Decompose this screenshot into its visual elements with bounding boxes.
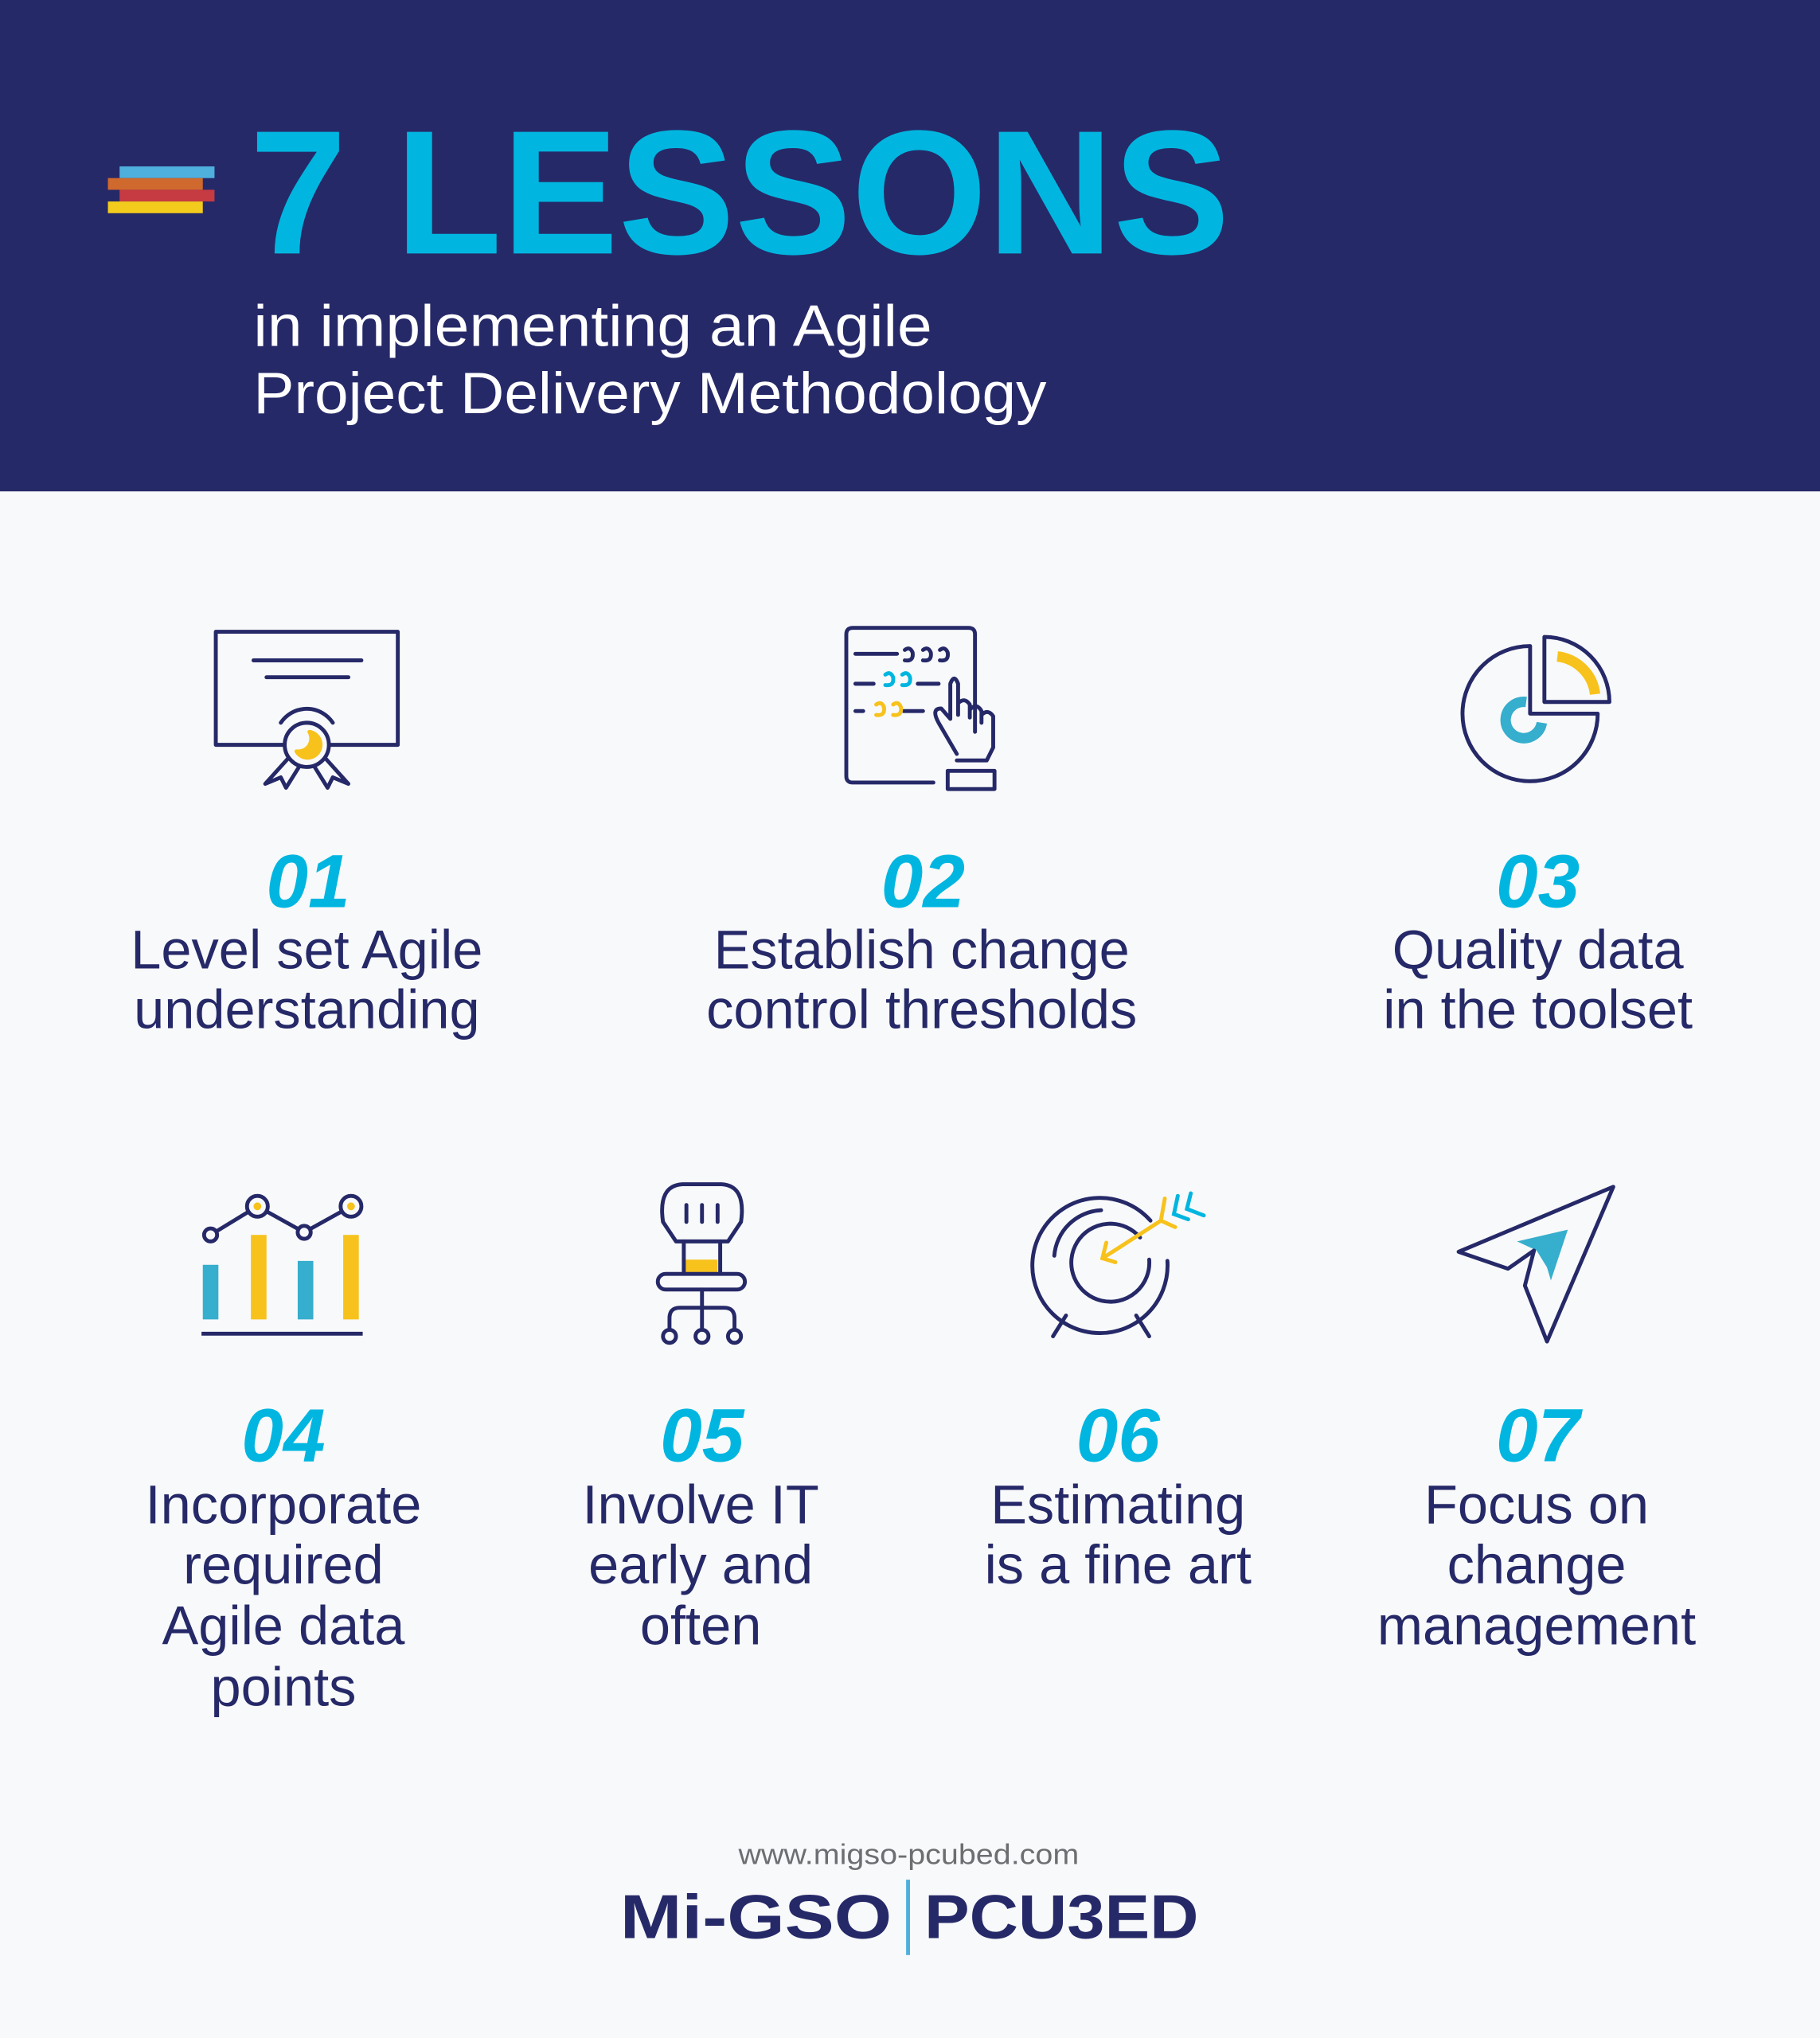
title: 7 LESSONS	[250, 94, 1230, 291]
subtitle line 2: Project Delivery Methodology	[253, 360, 1047, 426]
footer logo	[620, 1880, 1198, 1955]
footer url: www.migso-pcubed.com	[737, 1838, 1079, 1871]
lesson 04	[146, 1196, 421, 1717]
header band	[0, 0, 1820, 491]
icon: certificate	[216, 632, 398, 788]
lesson 07: change	[1447, 1534, 1627, 1595]
icon: pie chart	[1463, 637, 1609, 781]
icon: stacked color bars	[108, 166, 214, 213]
lesson 04: points	[210, 1656, 356, 1717]
number 02: 02	[881, 840, 965, 924]
lesson 05: early and	[588, 1534, 813, 1595]
number 07: 07	[1496, 1393, 1584, 1478]
lesson 07	[1377, 1187, 1696, 1657]
lesson 05: often	[640, 1595, 761, 1657]
number 05: 05	[660, 1393, 745, 1478]
text: Involve IT	[583, 1474, 819, 1536]
lesson 02	[706, 628, 1137, 1040]
number 03: 03	[1496, 840, 1580, 924]
text: Incorporate	[146, 1474, 421, 1536]
text: Establish change	[714, 919, 1130, 980]
lesson 01	[131, 632, 482, 1040]
lesson 07: management	[1377, 1595, 1696, 1657]
footer logo: Mi-GSO	[620, 1882, 892, 1952]
number 01: 01	[266, 840, 350, 924]
icon: paper plane	[1459, 1187, 1613, 1341]
text: Level set Agile	[131, 919, 482, 980]
subtitle: in implementing an Agile	[253, 292, 932, 358]
lesson 04: required	[183, 1534, 384, 1595]
text: Estimating	[990, 1474, 1245, 1536]
lesson 02: control thresholds	[706, 979, 1137, 1040]
icon: document with hand	[846, 628, 994, 789]
lesson 04: Agile data	[162, 1595, 405, 1657]
number 06: 06	[1076, 1393, 1161, 1478]
text: Focus on	[1424, 1474, 1649, 1536]
footer logo: PCU3ED	[924, 1882, 1198, 1952]
icon: office chair	[658, 1185, 745, 1343]
lesson 06	[985, 1193, 1252, 1595]
icon: bar and line chart	[201, 1196, 363, 1333]
lesson 05	[583, 1185, 819, 1657]
number 04: 04	[241, 1393, 326, 1478]
lesson 03: in the toolset	[1383, 979, 1693, 1040]
lesson 01: understanding	[134, 979, 480, 1040]
lesson 06: is a fine art	[985, 1534, 1252, 1595]
lesson 03	[1383, 637, 1693, 1040]
icon: target with arrow	[1033, 1193, 1204, 1337]
text: Quality data	[1392, 919, 1684, 980]
